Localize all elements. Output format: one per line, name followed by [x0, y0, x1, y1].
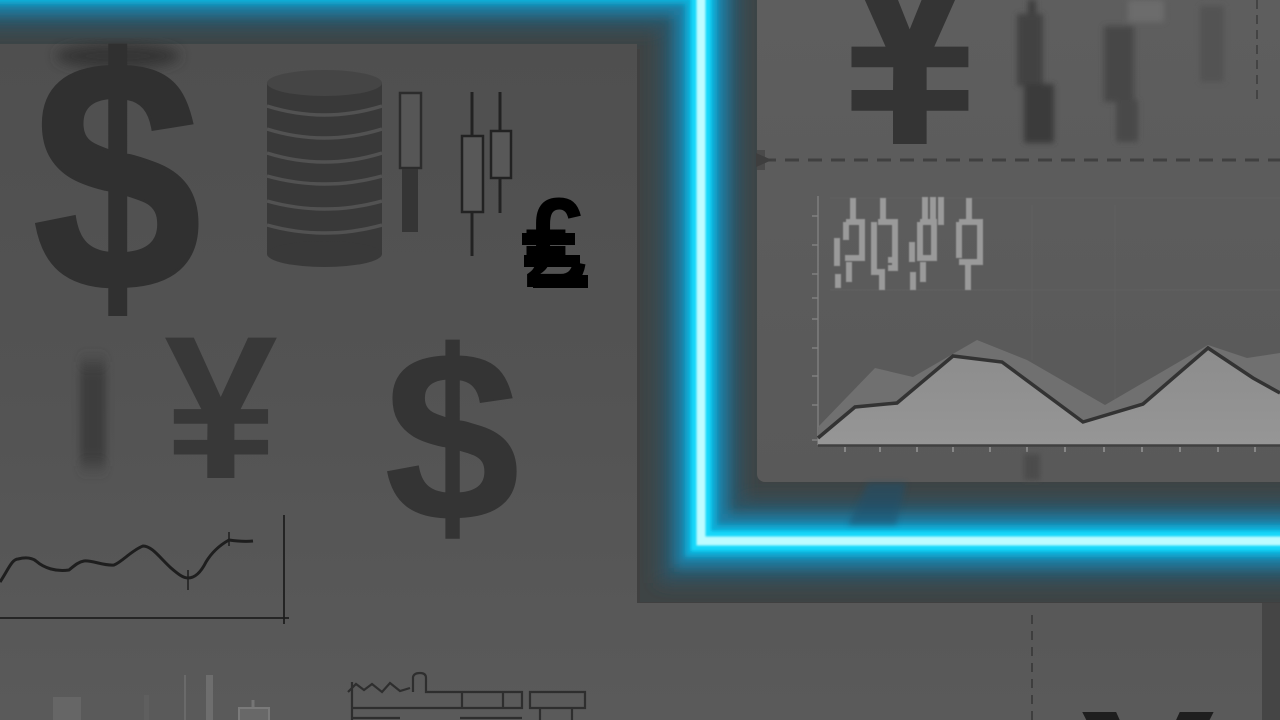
chart: area and line market chart	[812, 196, 1280, 480]
panel: dark edge bottom right	[1262, 603, 1280, 720]
icon: pound sign: ₤	[525, 172, 587, 315]
icon: middle yen sign: ¥	[164, 294, 278, 522]
icon: large dollar sign: $	[33, 0, 201, 361]
front area series	[818, 348, 1280, 445]
icon: middle dollar sign: $	[385, 302, 519, 572]
divider: dashed vertical line top right	[1256, 0, 1258, 100]
glow shadow under chart board	[848, 483, 906, 525]
icon: blurred candlesticks top right	[1017, 0, 1224, 143]
line series	[818, 348, 1280, 438]
chart: small line chart	[0, 515, 289, 624]
back area series	[818, 340, 1280, 445]
divider: dashed line in right board	[762, 158, 1280, 162]
icon: bottom table sketch	[348, 673, 585, 720]
divider: dashed vertical line bottom	[1031, 615, 1033, 720]
icon: coin stack	[267, 70, 382, 267]
icon: small tick at divider	[756, 153, 772, 167]
shadow smudge below chart	[1024, 454, 1040, 480]
chart axis	[812, 196, 1255, 452]
baseline	[818, 444, 1280, 447]
icon: light candlesticks on chart	[837, 197, 980, 290]
icon: bottom candlesticks	[53, 675, 269, 720]
grid lines	[830, 198, 1280, 400]
panel: right chart board	[757, 0, 1280, 482]
icon: candlesticks beside coins	[400, 92, 511, 256]
icon: blurred candle left	[80, 362, 106, 466]
